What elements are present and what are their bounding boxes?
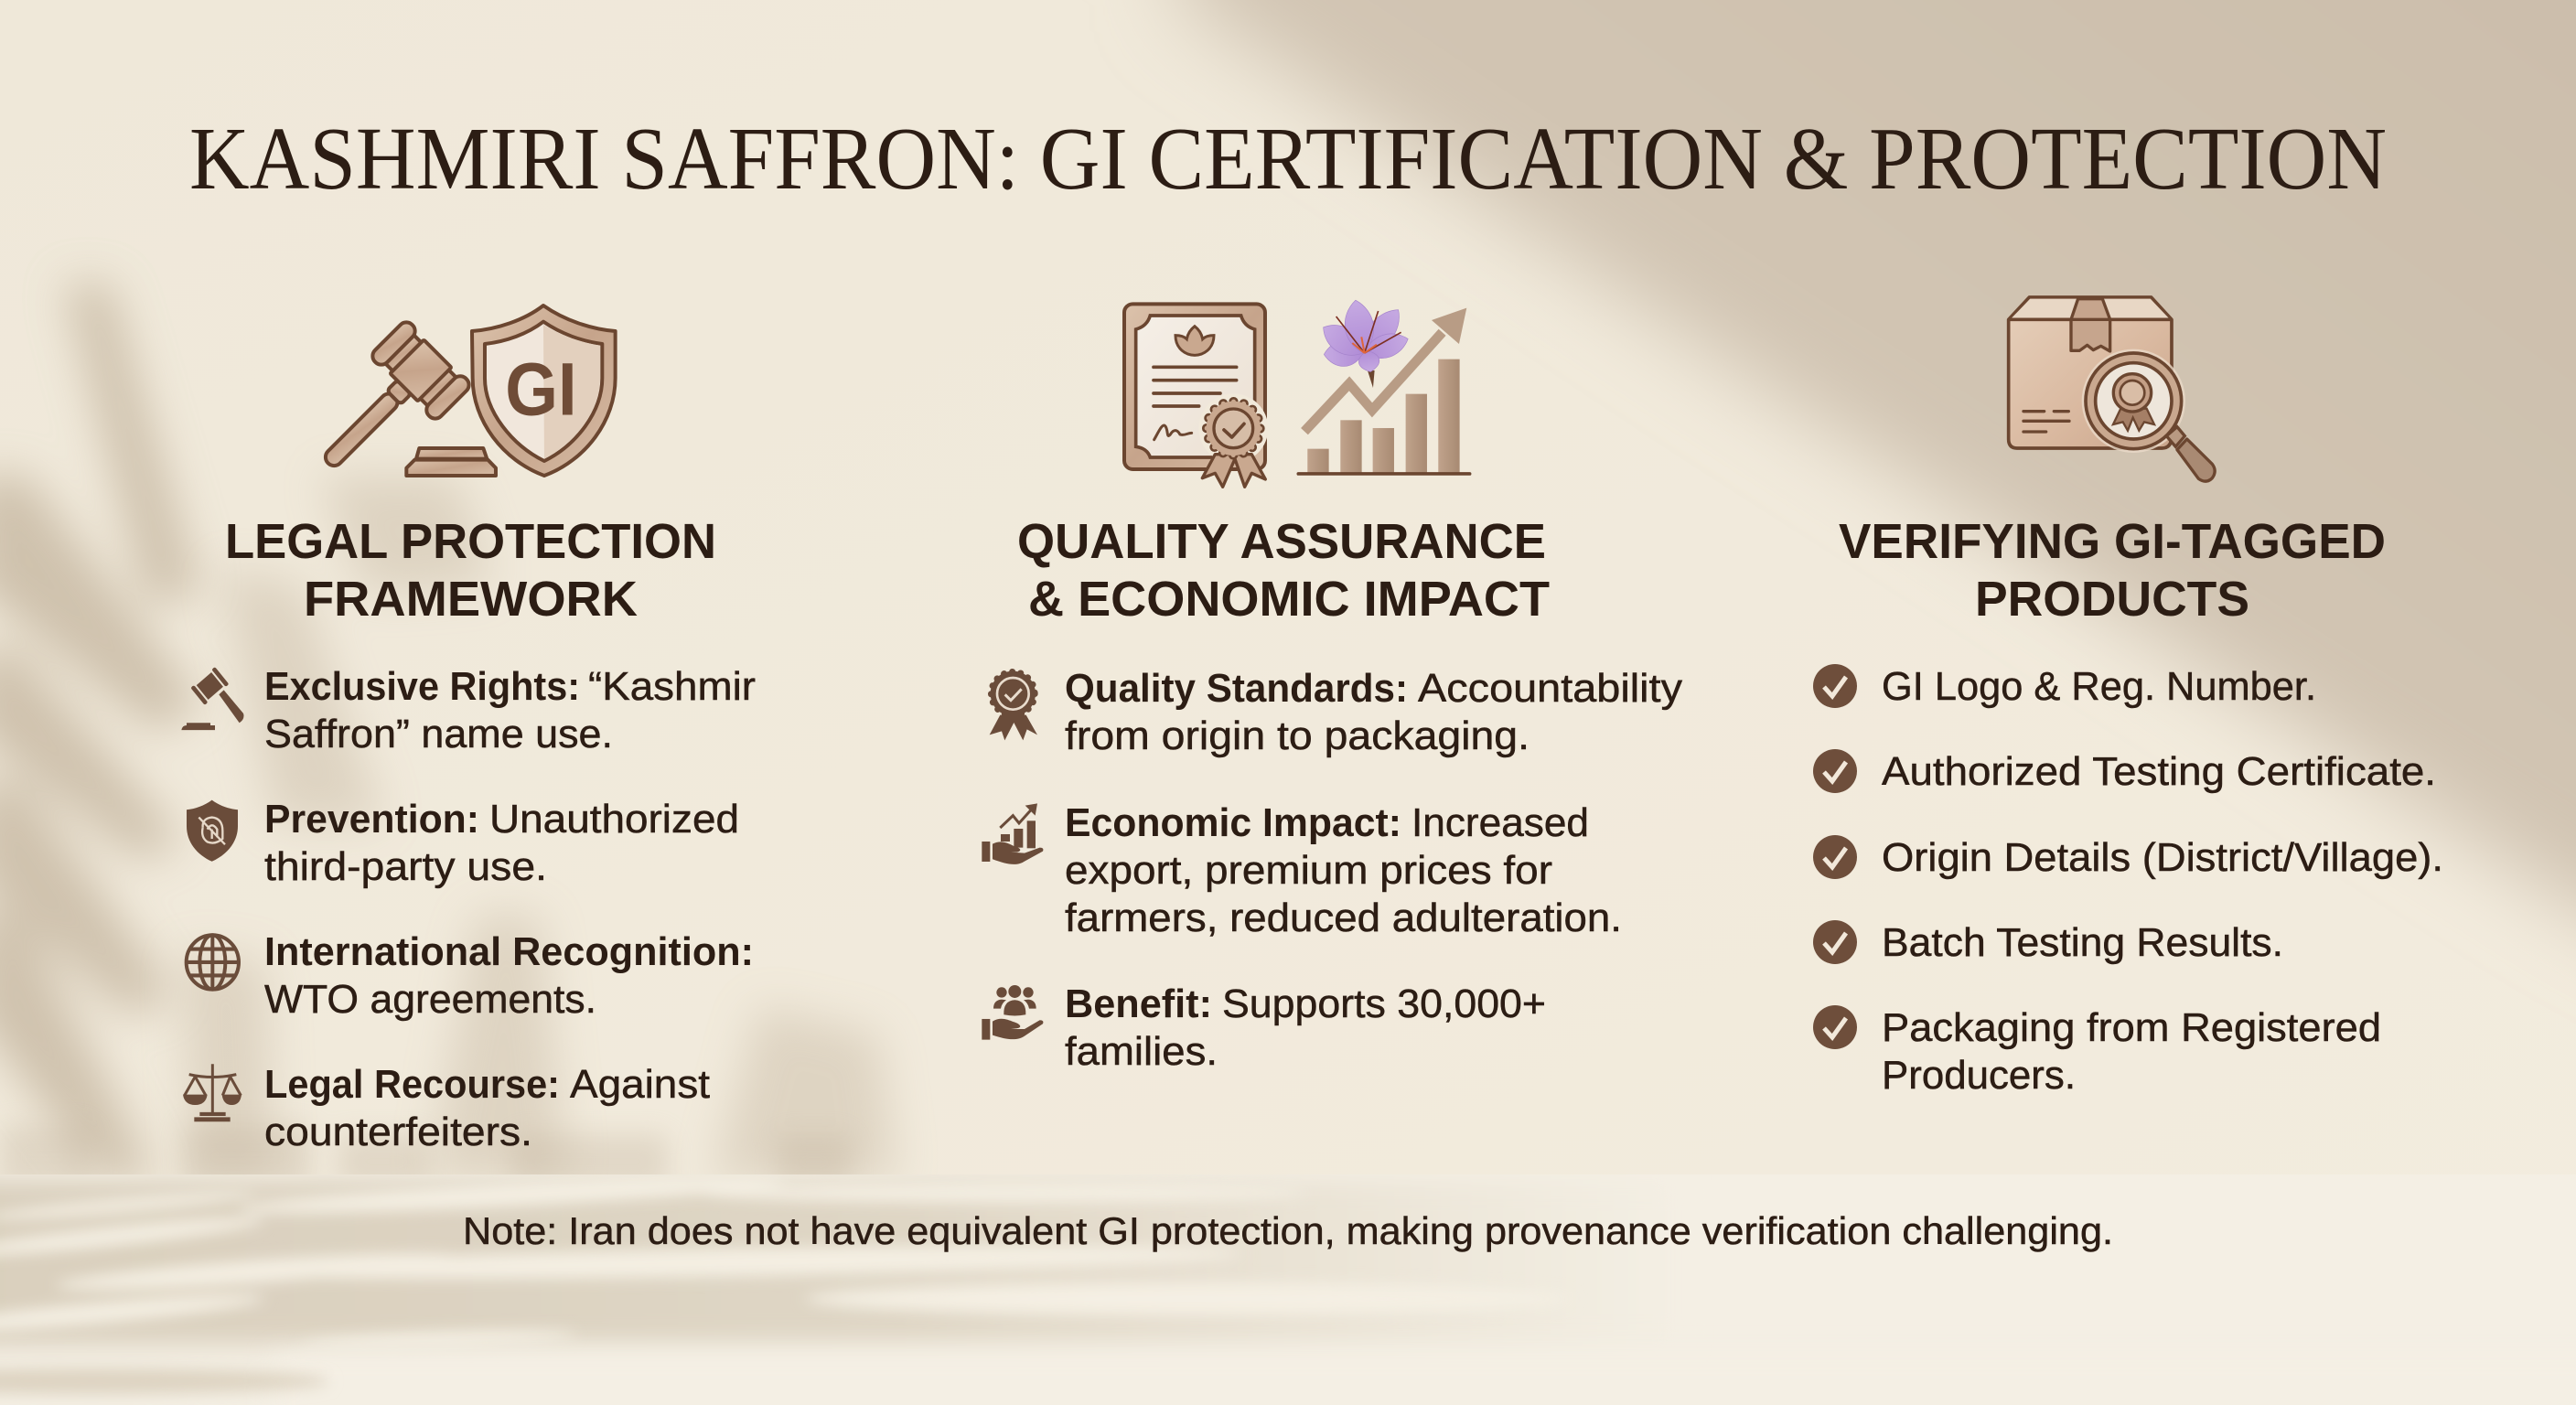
- heading: legal protection framework: LEGAL PROTECTION: [225, 514, 716, 569]
- icon: small shield: [187, 800, 238, 862]
- icon: gavel and GI shield: GI: [505, 348, 577, 431]
- text: benefit: [1065, 981, 1546, 1074]
- panel: legal protection framework: [181, 306, 756, 1154]
- text: legal recourse: [264, 1062, 710, 1154]
- text: quality standards: Quality Standards:: [1065, 666, 1408, 711]
- text: economic impact: export, premium prices for: [1065, 848, 1552, 893]
- text: benefit: families.: [1065, 1029, 1218, 1074]
- text: economic impact: Increased: [1411, 800, 1589, 845]
- heading: quality assurance and economic impact: [1017, 514, 1550, 627]
- icon: certificate with rosette: [1124, 304, 1268, 487]
- text: prevention: [264, 797, 739, 889]
- note: Note: Iran does not have equivalent GI protection, making provenance verification challenging.: [463, 1209, 2113, 1252]
- checklist: GI logo: GI Logo & Reg. Number.: [1882, 664, 2316, 709]
- text: economic impact: [1065, 800, 1622, 940]
- checklist: batch testing: Batch Testing Results.: [1882, 920, 2283, 965]
- text: exclusive rights: Saffron” name use.: [264, 712, 613, 756]
- text: international recognition: International Recognition:: [264, 929, 754, 974]
- checklist: testing certificate: Authorized Testing Certificate.: [1882, 749, 2436, 794]
- heading: quality assurance and economic impact: QUALITY ASSURANCE: [1017, 514, 1546, 569]
- heading: verifying GI-tagged products: VERIFYING GI-TAGGED: [1839, 514, 2386, 569]
- icon: hand with people: [982, 985, 1043, 1040]
- text: quality standards: Accountability: [1418, 666, 1682, 711]
- text: exclusive rights: Exclusive Rights:: [264, 664, 580, 709]
- text: prevention: Unauthorized: [489, 797, 739, 842]
- icon: scales: [183, 1064, 242, 1121]
- text: international recognition: [264, 929, 754, 1022]
- icon: globe: [187, 935, 239, 990]
- text: economic impact: Economic Impact:: [1065, 800, 1401, 845]
- icon: small rosette: [990, 671, 1037, 740]
- icon: package with magnifier: [2009, 297, 2215, 481]
- checklist: registered producers: Packaging from Registered: [1882, 1005, 2381, 1050]
- panel: verifying GI-tagged products: [1813, 297, 2443, 1098]
- text: exclusive rights: “Kashmir: [588, 664, 756, 709]
- checklist: registered producers: [1813, 1005, 2381, 1098]
- text: benefit: Supports 30,000+: [1222, 981, 1546, 1026]
- icon: gavel and GI shield: [295, 306, 616, 496]
- text: legal recourse: counterfeiters.: [264, 1110, 532, 1154]
- heading: verifying GI-tagged products: PRODUCTS: [1975, 572, 2249, 627]
- text: exclusive rights: [264, 664, 756, 756]
- icon: saffron flower and rising chart: [1298, 298, 1470, 474]
- heading: legal protection framework: FRAMEWORK: [304, 572, 638, 627]
- heading: verifying GI-tagged products: [1839, 514, 2386, 627]
- checklist: origin details: Origin Details (District/Village).: [1882, 835, 2443, 880]
- icon: hand with chart: [982, 803, 1043, 864]
- text: benefit: Benefit:: [1065, 981, 1212, 1026]
- text: economic impact: farmers, reduced adulteration.: [1065, 896, 1622, 940]
- text: quality standards: [1065, 666, 1682, 758]
- icon: small gavel: [181, 667, 243, 730]
- panel: quality assurance and economic impact: [982, 298, 1682, 1074]
- title: KASHMIRI SAFFRON: GI CERTIFICATION & PROTECTION: [189, 110, 2387, 208]
- text: legal recourse: Legal Recourse:: [264, 1062, 560, 1107]
- heading: legal protection framework: [225, 514, 716, 627]
- text: legal recourse: Against: [570, 1062, 710, 1107]
- checklist: registered producers: Producers.: [1882, 1053, 2076, 1098]
- text: prevention: Prevention:: [264, 797, 479, 842]
- text: quality standards: from origin to packaging.: [1065, 713, 1530, 758]
- heading: quality assurance and economic impact: & ECONOMIC IMPACT: [1028, 572, 1550, 627]
- text: prevention: third-party use.: [264, 844, 547, 889]
- text: international recognition: WTO agreements.: [264, 977, 596, 1022]
